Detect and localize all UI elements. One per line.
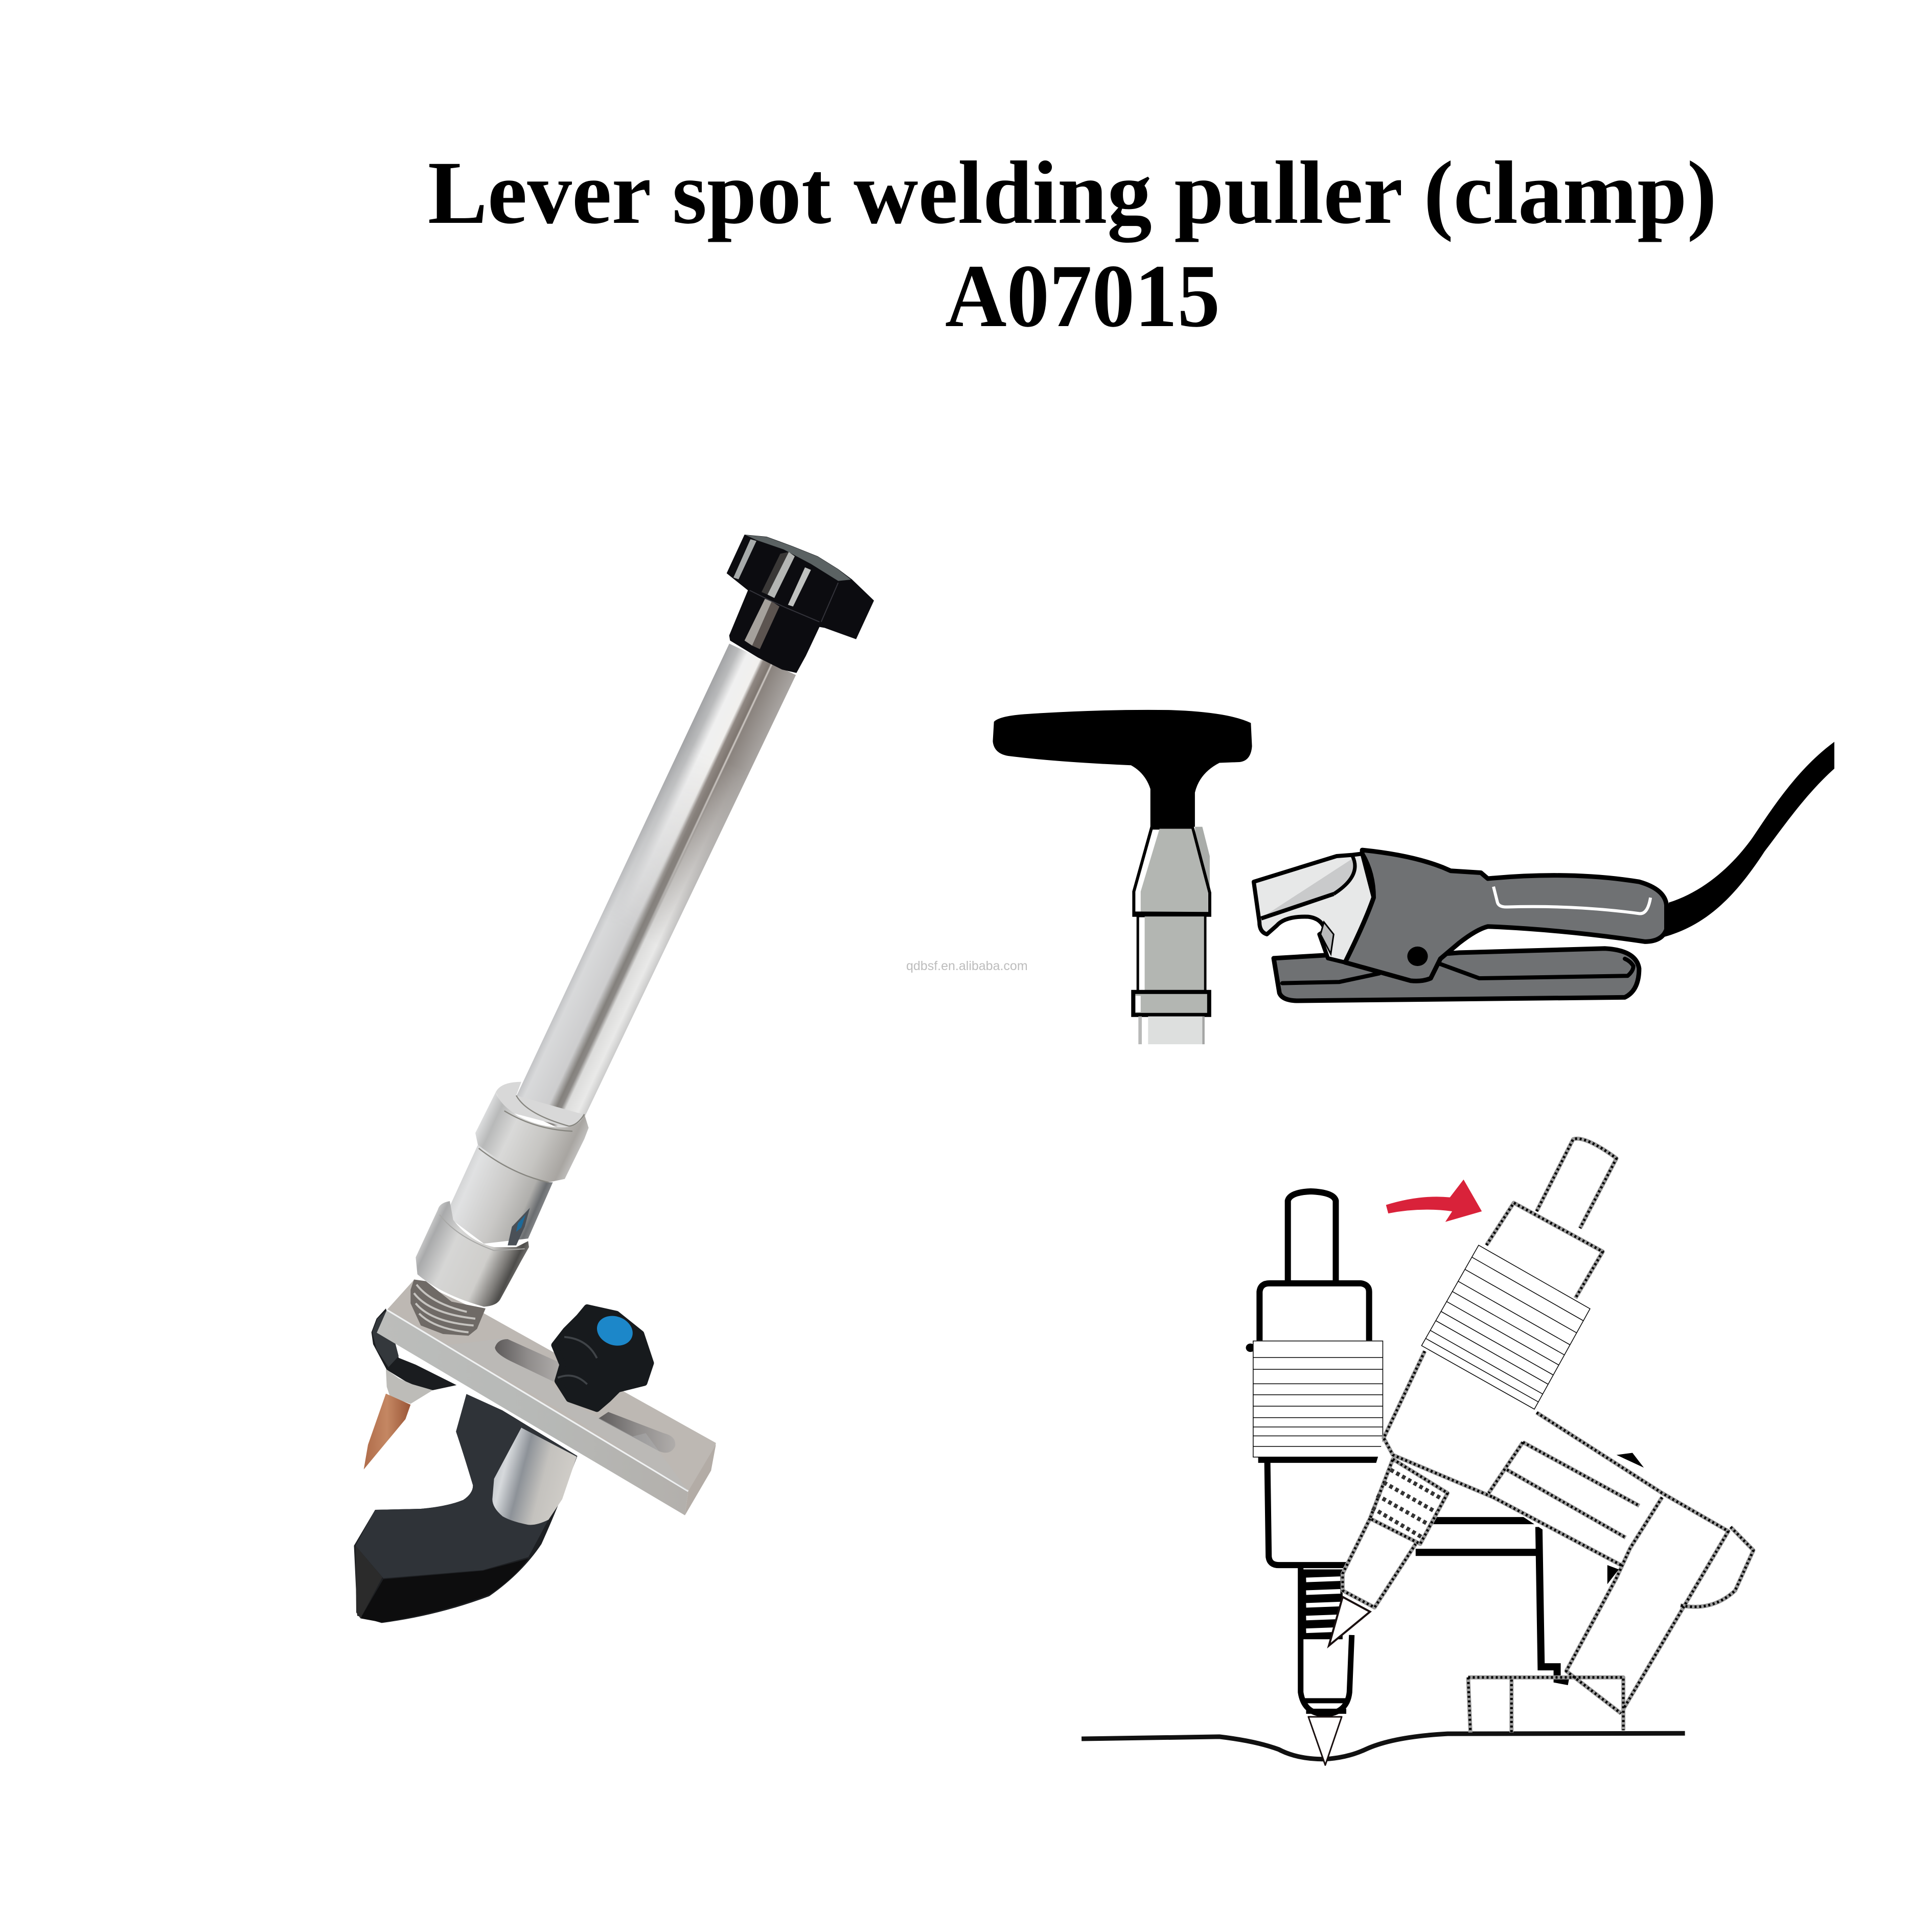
illustration: puller lever diagram	[1082, 1139, 1754, 1765]
watermark: qdbsf.en.alibaba.com	[906, 959, 1028, 973]
title: Lever spot welding puller (clamp)	[428, 143, 1717, 243]
T-handle	[993, 710, 1252, 827]
upper handle	[1345, 850, 1667, 981]
title	[428, 143, 1717, 346]
slotted bar	[377, 1280, 716, 1515]
upright tool ribbed sleeve	[1253, 1341, 1383, 1457]
stem below bar	[492, 1428, 577, 1525]
cable	[1665, 742, 1834, 937]
threaded spring	[410, 1279, 486, 1336]
bracket lines	[1416, 1521, 1569, 1682]
title: A07015	[945, 246, 1220, 346]
copper tip and holder	[364, 1308, 456, 1469]
tilted tool needle tip	[1329, 1597, 1370, 1646]
tilted tool ribbed sleeve	[1421, 1245, 1590, 1409]
collars	[416, 1082, 589, 1307]
lower jaw	[1274, 949, 1639, 1001]
main tube	[512, 643, 796, 1137]
hook foot	[354, 1394, 578, 1623]
blue-capped locking knob	[555, 1307, 651, 1409]
photo: lever spot welding puller	[354, 535, 874, 1623]
handle knob	[727, 535, 874, 673]
black details	[1607, 1453, 1644, 1584]
shaft	[1133, 827, 1211, 1044]
tilted tool white body	[1343, 1139, 1728, 1709]
illustration: T-handle and shaft	[993, 710, 1252, 1044]
illustration: welding clamp with cable	[1254, 742, 1834, 1001]
base line	[1082, 1733, 1685, 1759]
silver jaw	[1254, 854, 1373, 962]
slot opening	[495, 1339, 561, 1382]
upright tool	[1246, 1191, 1391, 1765]
tilted tool dithered outline	[1343, 1139, 1754, 1733]
red arrow	[1386, 1180, 1482, 1222]
